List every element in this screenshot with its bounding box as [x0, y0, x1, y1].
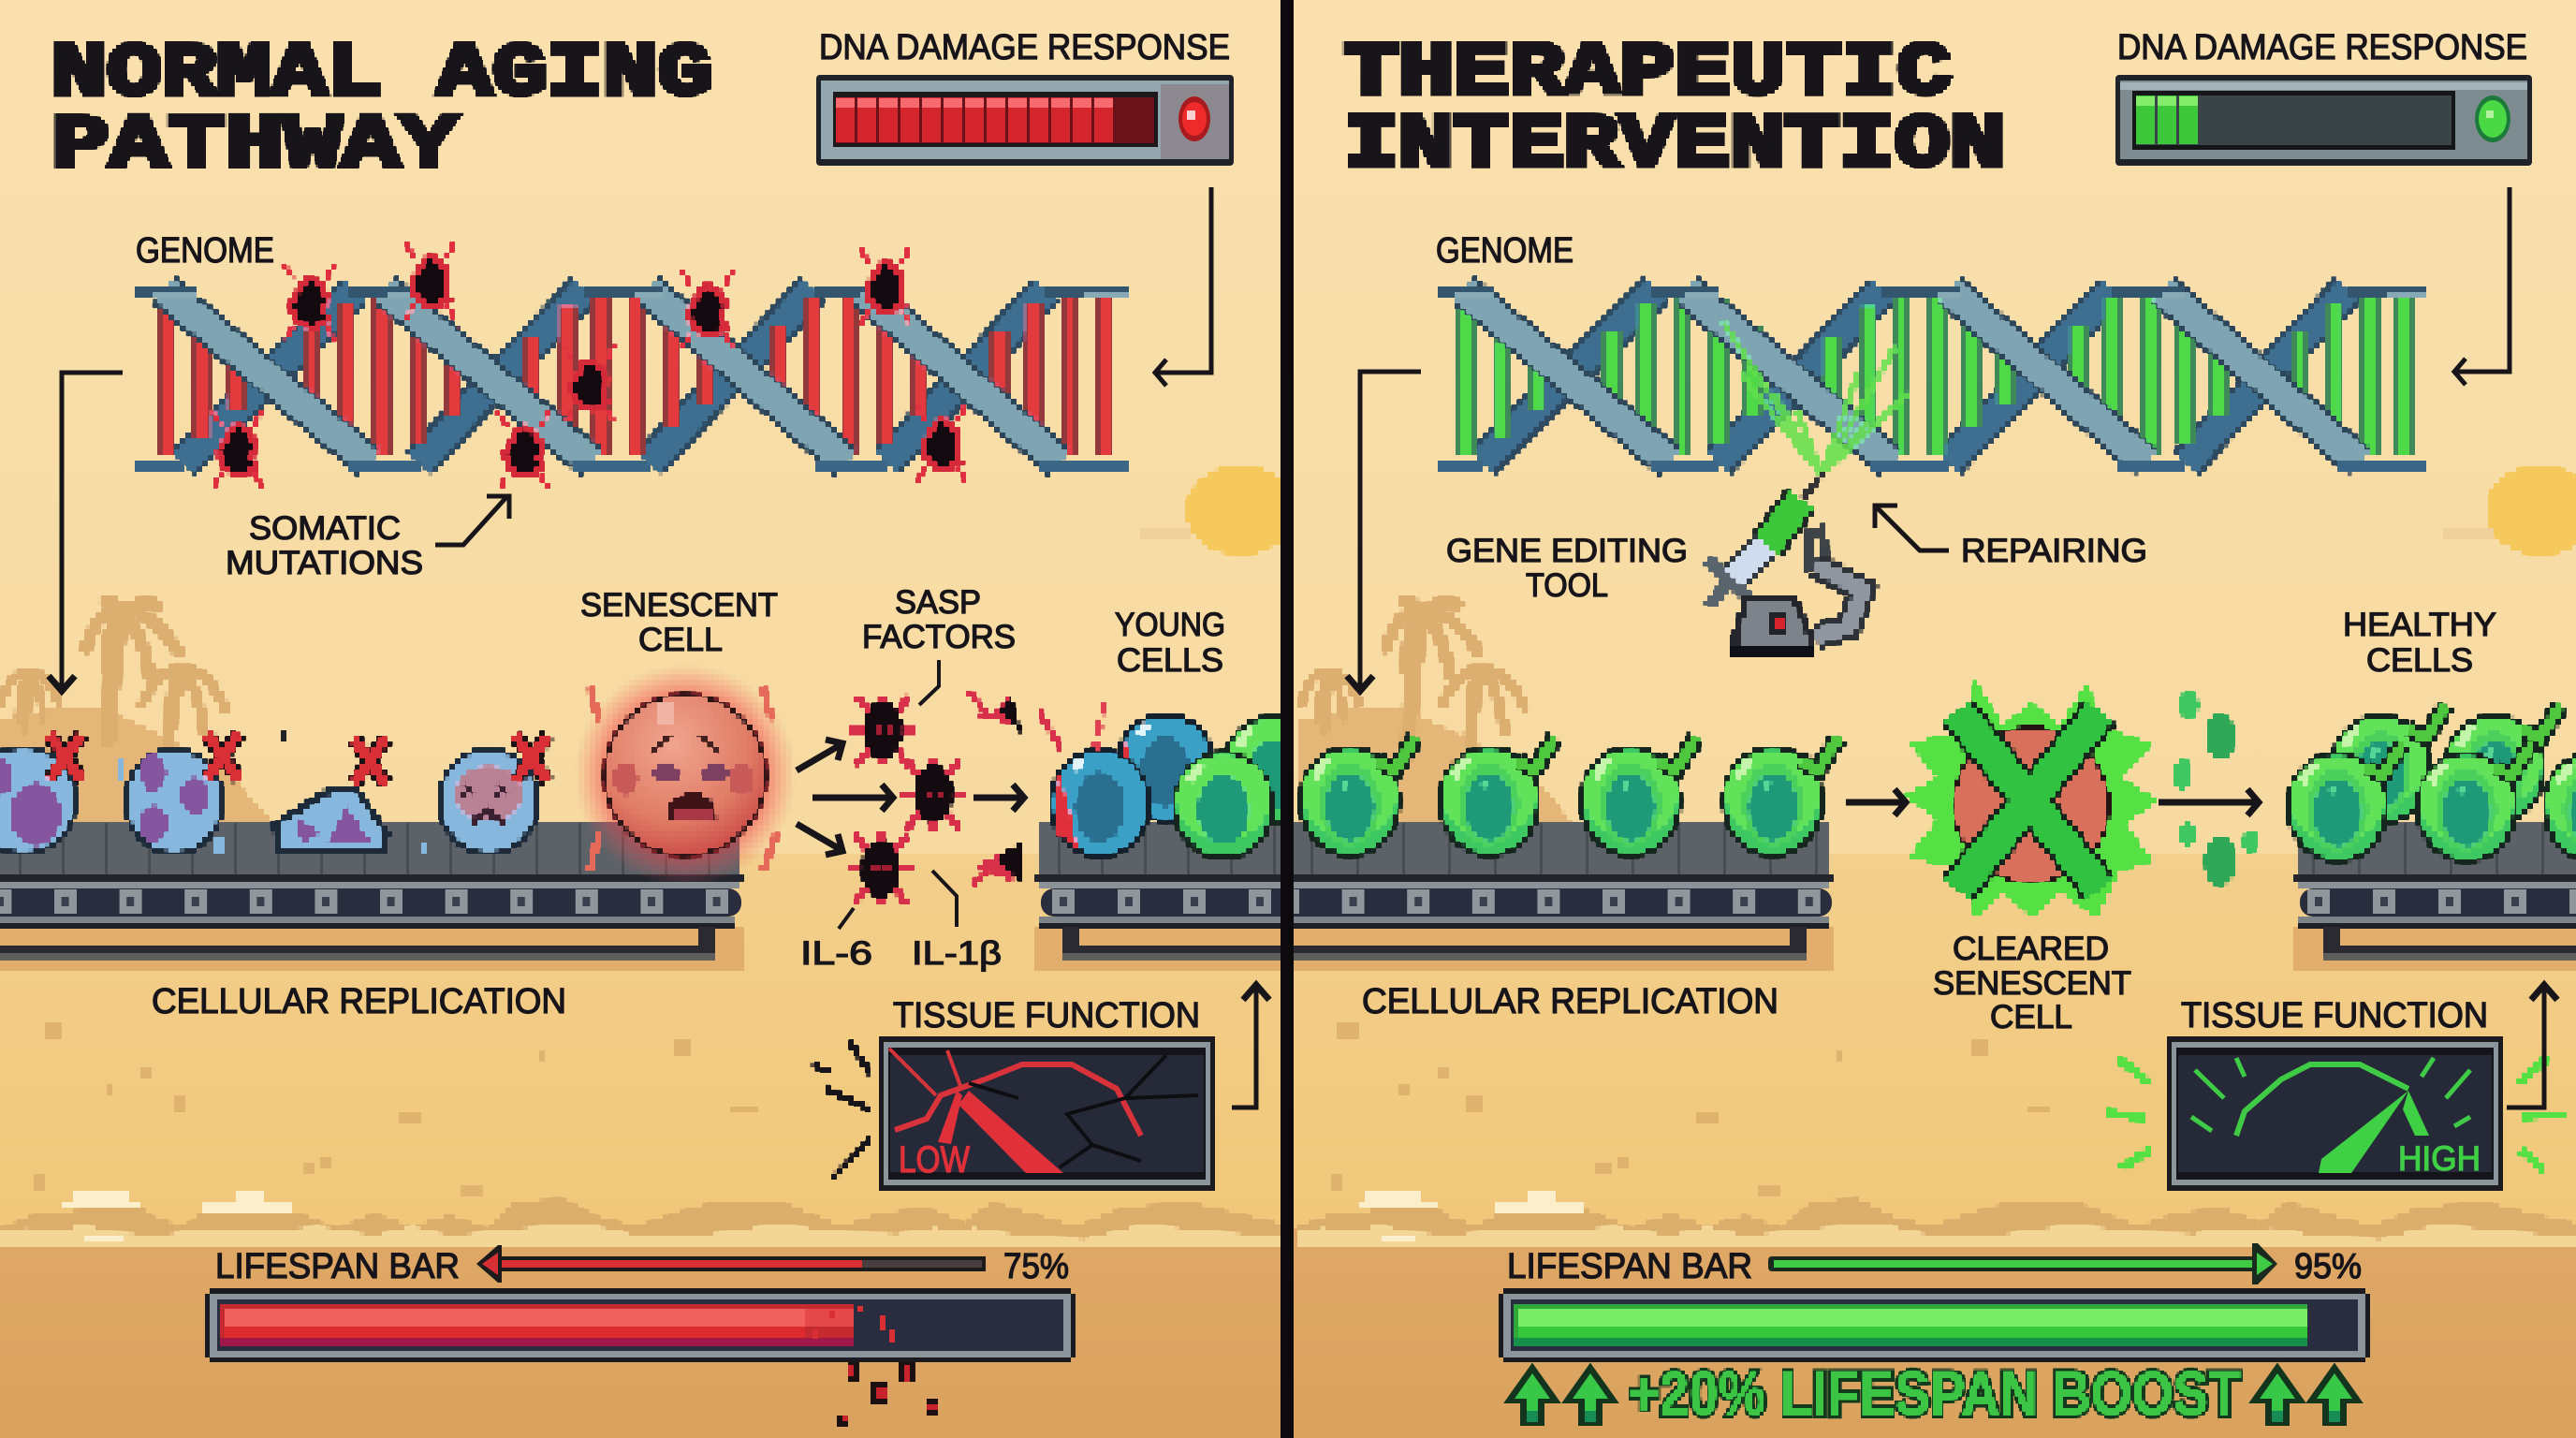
- repair spray beams: [1723, 322, 1910, 475]
- scenery: sun, palms and shoreline: [0, 465, 1295, 1247]
- label: SASP factors: SASP: [895, 584, 981, 621]
- value: 95 percent: 95%: [2294, 1247, 2362, 1286]
- cleared senescent cell with green X: [1905, 681, 2158, 917]
- scenery: sun, palms and shoreline right: [1295, 465, 2576, 1247]
- label: healthy cells: CELLS: [2366, 642, 2473, 679]
- arrow: DNA damage feedback into genome: [1155, 187, 1211, 386]
- dying cells on belt: [0, 730, 548, 856]
- healthy cells on belt: [1298, 738, 1838, 858]
- title: therapeutic intervention: INTERVENTION: [1343, 103, 2005, 188]
- arrow: genome to healthy replication: [1347, 372, 1421, 691]
- icons: lifespan boost arrows left: [1507, 1366, 1616, 1424]
- label: cleared senescent cell: SENESCENT: [1933, 965, 2131, 1002]
- arrows: healthy flow through clearance: [1846, 789, 2259, 815]
- meter: DNA damage response high: [816, 75, 1234, 166]
- label: cellular replication right: CELLULAR REPLICATION: [1362, 982, 1778, 1021]
- label: gene editing tool: GENE EDITING: [1446, 533, 1688, 569]
- label: SASP factors: [862, 584, 1016, 655]
- label: SASP factors: FACTORS: [862, 619, 1016, 655]
- label: lifespan bar right: LIFESPAN BAR: [1507, 1247, 1752, 1286]
- pixel-art actors: repaired DNA, healthy cells, tool: [1298, 285, 2576, 1170]
- callout: +20% lifespan boost: +20% LIFESPAN BOOST: [1629, 1358, 2241, 1428]
- label: young cells: CELLS: [1117, 642, 1223, 679]
- lifespan shed particles: [839, 1363, 938, 1425]
- label: somatic mutations: SOMATIC: [249, 510, 401, 547]
- gauge cracks outside frame: [812, 1042, 871, 1178]
- value: 75 percent: 75%: [1003, 1247, 1069, 1286]
- label: healthy cells: HEALTHY: [2343, 607, 2496, 643]
- arrow: somatic mutations pointer: [435, 496, 509, 545]
- conveyor: young cells right belt: [1034, 822, 1303, 971]
- arrow: lifespan increasing: [1768, 1243, 2277, 1284]
- label: cellular replication: CELLULAR REPLICATION: [152, 982, 566, 1021]
- panel: normal aging pathway: [0, 28, 1325, 1425]
- label: genome right: GENOME: [1436, 231, 1573, 271]
- label: IL-6: IL-6: [800, 935, 872, 972]
- label: gene editing tool: TOOL: [1526, 567, 1608, 604]
- label: tissue function: TISSUE FUNCTION: [893, 996, 1200, 1035]
- label: somatic mutations: [226, 510, 423, 581]
- label: senescent cell: CELL: [638, 622, 723, 658]
- label: senescent cell: [580, 587, 778, 658]
- label: repairing: REPAIRING: [1961, 533, 2147, 569]
- senescent cell with glowing aura: [575, 665, 796, 886]
- somatic mutation blots: [212, 242, 966, 489]
- label: somatic mutations: MUTATIONS: [226, 545, 423, 581]
- arrow: tissue function up to young cells: [1232, 985, 1269, 1108]
- label: healthy cells: [2343, 607, 2496, 679]
- label: cleared senescent cell: CLEARED: [1953, 931, 2109, 967]
- heading: DNA damage response: DNA DAMAGE RESPONSE: [819, 28, 1230, 67]
- young cells being damaged: [1048, 702, 1325, 860]
- arrow: genome down to cellular replication: [49, 373, 123, 691]
- conveyor: healthy cells belt: [2293, 822, 2576, 971]
- label: cleared senescent cell: CELL: [1990, 999, 2072, 1035]
- arrow: tissue function up to healthy cells: [2507, 985, 2557, 1108]
- gauge: tissue function high: HIGH: [2398, 1139, 2481, 1178]
- gauge: tissue function low: [879, 1036, 1215, 1191]
- label: cleared senescent cell: [1933, 931, 2131, 1035]
- bar: lifespan 75 percent: [205, 1288, 1076, 1362]
- divider between panels: [1281, 0, 1294, 1438]
- DNA helix with green repaired rungs: [1436, 285, 2427, 472]
- arrows: senescent cell releasing SASP factors: [797, 740, 1024, 855]
- label: tissue function right: TISSUE FUNCTION: [2181, 996, 2488, 1035]
- label: IL-1 beta: IL-1β: [912, 935, 1002, 972]
- label: lifespan bar: LIFESPAN BAR: [215, 1247, 460, 1286]
- title: normal aging pathway: PATHWAY: [51, 104, 458, 189]
- gene editing syringe and robot arm: [1708, 473, 1863, 659]
- label: genome: GENOME: [136, 231, 274, 271]
- cleared debris particles: [2174, 692, 2258, 886]
- meter: DNA damage response low: [2115, 75, 2532, 166]
- arrow: DNA repair feedback into genome: [2454, 187, 2510, 385]
- conveyor: cellular replication left belt: [0, 822, 744, 971]
- gauge high sparks: [2105, 1058, 2565, 1170]
- heading: DNA damage response right: DNA DAMAGE RESPONSE: [2117, 28, 2527, 67]
- arrow: lifespan declining: [476, 1245, 986, 1283]
- arrow: repairing pointer: [1875, 506, 1949, 550]
- title: therapeutic intervention: THERAPEUTIC: [1343, 31, 1952, 116]
- label: senescent cell: SENESCENT: [580, 587, 778, 624]
- label: gene editing tool: [1446, 533, 1688, 604]
- bar: lifespan 95 percent: [1499, 1288, 2370, 1362]
- title: normal aging pathway: NORMAL AGING: [51, 32, 712, 117]
- healthy young cell cluster: [2286, 706, 2576, 863]
- pixel-art actors: DNA, cells, SASP factors: [0, 242, 1325, 1425]
- panel: therapeutic intervention: [1277, 28, 2576, 1428]
- SASP factor particles: [849, 691, 1061, 904]
- label: young cells: YOUNG: [1115, 607, 1225, 643]
- leader lines: SASP and interleukins: [839, 660, 957, 929]
- title: normal aging pathway: [51, 32, 712, 189]
- title: therapeutic intervention: [1343, 31, 2005, 188]
- conveyor: cellular replication healthy belt: [1277, 822, 1834, 971]
- gauge: tissue function high: [2167, 1036, 2503, 1191]
- DNA helix with red damaged rungs: [136, 285, 1127, 472]
- icons: lifespan boost arrows right: [2252, 1366, 2360, 1424]
- gauge: tissue function low: LOW: [899, 1139, 970, 1181]
- label: young cells: [1115, 607, 1225, 679]
